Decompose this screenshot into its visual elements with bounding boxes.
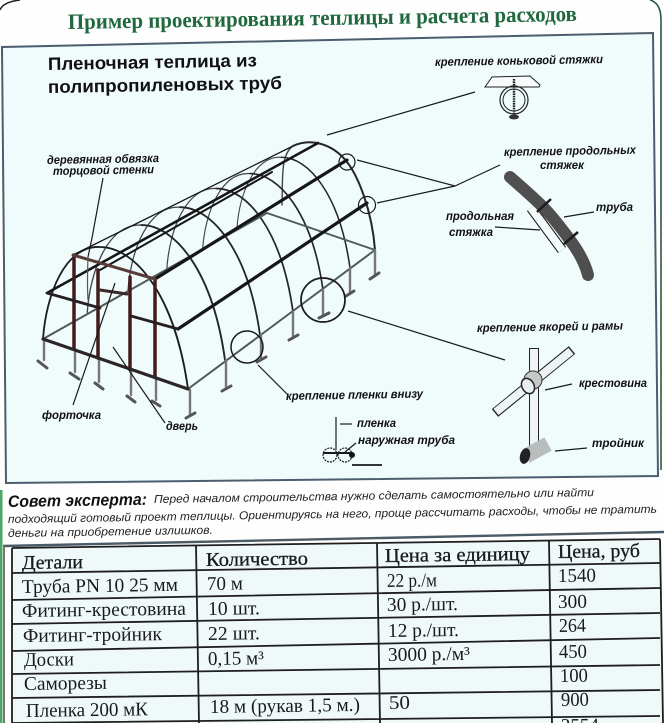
table rows: 0,15 м³ <box>208 648 264 670</box>
base rails <box>43 213 375 389</box>
table header <box>22 541 640 574</box>
table rows: Фитинг-крестовина <box>22 599 186 622</box>
labels: труба <box>596 200 633 214</box>
table rows: 50 <box>389 693 410 714</box>
table rows: 3000 р./м³ <box>388 644 470 666</box>
tip text: подходящий готовый проект теплицы. Ориентируясь на него, проще рассчитать расходы, чтобы не тратить <box>8 504 657 526</box>
table rows: 1540 <box>558 565 596 587</box>
labels: деревянная обвязка <box>47 151 159 167</box>
table rows: Доски <box>24 649 74 671</box>
labels: дверь <box>166 419 198 433</box>
table rows: 100 <box>560 666 588 687</box>
labels: стяжек <box>540 158 585 172</box>
leader lines <box>73 92 594 452</box>
table rows: Фитинг-тройник <box>23 624 163 647</box>
table rows: 450 <box>559 642 587 663</box>
icon: ridge fastener <box>485 76 540 119</box>
icon: cross fitting and tee <box>495 348 572 465</box>
table rows: 264 <box>559 616 586 637</box>
labels: крестовина <box>579 376 647 390</box>
table: cost estimate <box>3 532 664 723</box>
labels: пленка <box>357 416 396 430</box>
table rows: 300 <box>558 592 587 613</box>
labels: крепление якорей и рамы <box>477 318 624 335</box>
table rows: 70 м <box>207 573 243 595</box>
table rows <box>22 565 599 723</box>
table header: Цена за единицу <box>385 544 530 567</box>
heading: Пленочная теплица из <box>48 50 257 74</box>
labels <box>42 52 647 450</box>
labels: тройник <box>592 436 645 450</box>
table rows: 22 шт. <box>208 623 260 645</box>
detail circles <box>231 154 376 363</box>
panel: greenhouse diagram <box>2 33 658 483</box>
tip text: Перед началом строительства нужно сделать самостоятельно или найти <box>154 487 595 506</box>
wooden frame <box>43 255 188 389</box>
expert tip <box>8 487 657 540</box>
table header: Детали <box>22 552 83 574</box>
icon: film attachment detail <box>323 417 382 465</box>
title: Пример проектирования теплицы и расчета расходов <box>68 1 577 34</box>
table rows: Пленка 200 мК <box>26 699 149 722</box>
labels: крепление пленки внизу <box>286 387 424 403</box>
table rows: 18 м (рукав 1,5 м.) <box>210 695 360 718</box>
labels: продольная <box>446 209 514 223</box>
arches left sides <box>87 146 293 312</box>
table rows: 22 р./м <box>387 570 437 592</box>
table rows: 30 р./шт. <box>387 594 458 616</box>
table rows: Труба PN 10 25 мм <box>22 575 178 598</box>
heading: полипропиленовых труб <box>48 73 282 97</box>
arches right sides <box>141 142 375 360</box>
heading <box>48 50 282 97</box>
greenhouse frame <box>38 142 379 418</box>
front arch <box>43 247 188 389</box>
labels: крепление коньковой стяжки <box>435 52 604 69</box>
table header: Количество <box>206 549 308 571</box>
labels: крепление продольных <box>504 143 637 159</box>
ridge rails <box>47 143 367 329</box>
table rows: 12 р./шт. <box>388 620 459 642</box>
labels: торцовой стенки <box>53 162 155 178</box>
tip heading: Совет эксперта: <box>8 491 147 511</box>
tip text: деньги на приобретение излишков. <box>8 525 213 540</box>
labels: стяжка <box>449 225 493 239</box>
icon: pipe with longitudinal tie <box>510 177 588 275</box>
legs <box>38 250 379 418</box>
table rows: Саморезы <box>24 673 107 695</box>
labels: форточка <box>42 408 101 422</box>
table header: Цена, руб <box>558 541 640 563</box>
table rows: 900 <box>561 690 589 711</box>
labels: наружная труба <box>358 433 455 447</box>
tip text <box>8 487 657 540</box>
table rows: 10 шт. <box>208 598 260 620</box>
